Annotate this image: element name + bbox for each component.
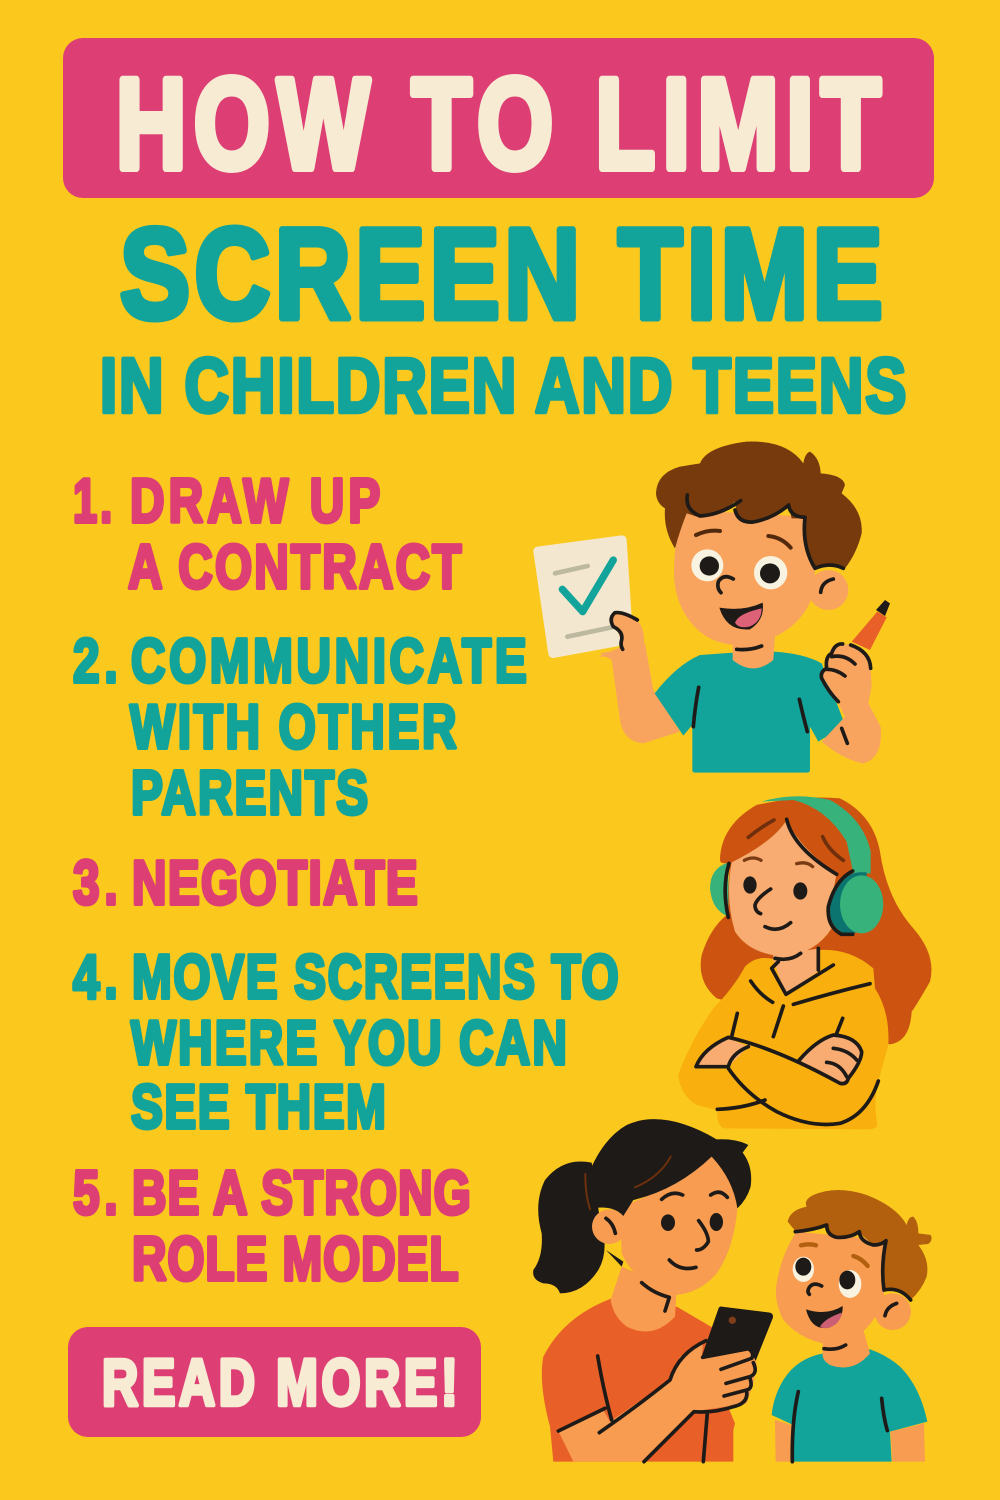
tip 4: 4.	[73, 942, 118, 1011]
tip 5	[73, 1158, 471, 1293]
eyebrows	[744, 858, 813, 867]
mother face	[620, 1157, 737, 1295]
mother ear	[592, 1209, 627, 1244]
mother facial features	[606, 1192, 727, 1311]
tip 1	[73, 466, 462, 601]
tip 4: SEE THEM	[131, 1072, 386, 1141]
mother arm and hand	[558, 1342, 757, 1462]
long hair	[701, 797, 931, 1044]
hoodie lines and arms	[696, 1038, 748, 1067]
tip 2: 2.	[73, 626, 118, 695]
son facial features	[793, 1244, 897, 1328]
eyes	[691, 549, 723, 581]
tip 4	[73, 942, 619, 1141]
son shirt	[772, 1349, 927, 1462]
left ear cup	[710, 862, 728, 917]
eyes	[743, 876, 757, 894]
nose	[718, 577, 733, 593]
read more button: READ MORE!	[102, 1346, 458, 1420]
neck	[772, 948, 820, 995]
smile	[765, 923, 791, 929]
checklist paper	[533, 535, 633, 658]
face	[674, 510, 815, 645]
eyebrows	[696, 531, 791, 548]
son neck	[823, 1330, 870, 1367]
phone	[702, 1307, 773, 1367]
tip 2: WITH OTHER	[130, 692, 456, 761]
subheading: in children and teens: IN CHILDREN AND TEENS	[100, 342, 906, 429]
left arm	[600, 643, 680, 743]
ear	[808, 570, 848, 610]
tip 5: ROLE MODEL	[132, 1224, 458, 1293]
pen	[821, 600, 890, 705]
illustration: mother and son with phone	[533, 1119, 932, 1462]
mother hair	[585, 1119, 751, 1216]
tip 3: NEGOTIATE	[132, 848, 418, 917]
son hair	[788, 1190, 932, 1300]
ponytail	[533, 1161, 605, 1293]
mother neck and collar	[611, 1267, 677, 1332]
tip 3: 3.	[73, 848, 118, 917]
son ear	[874, 1293, 911, 1330]
tip 2: COMMUNICATE	[131, 626, 527, 695]
tip 2	[73, 626, 527, 827]
hoodie	[678, 950, 888, 1129]
heading: screen time: SCREEN TIME	[120, 202, 883, 345]
tip 1: A CONTRACT	[128, 532, 462, 601]
illustration: girl with headphones	[678, 796, 931, 1129]
tip 2: PARENTS	[131, 758, 368, 827]
list of tips	[73, 466, 619, 1293]
tip 4: MOVE SCREENS TO	[132, 942, 619, 1011]
tip 1: 1.	[73, 468, 112, 536]
tip 4: WHERE YOU CAN	[131, 1008, 567, 1077]
headphones band	[762, 796, 871, 873]
hand holding paper	[598, 612, 644, 657]
fringe	[720, 802, 807, 863]
shirt	[655, 652, 845, 773]
illustration: boy with checklist and pen	[533, 442, 890, 773]
tip 5: 5.	[73, 1158, 118, 1227]
mother shirt	[542, 1298, 735, 1462]
read more button	[68, 1327, 481, 1437]
nose	[755, 889, 771, 914]
son face	[776, 1232, 885, 1345]
mouth	[719, 603, 763, 630]
heading: how to limit: HOW TO LIMIT	[116, 53, 881, 196]
neck	[733, 637, 775, 668]
right arm and hand	[822, 643, 881, 763]
title banner	[63, 38, 934, 198]
right ear cup	[830, 872, 867, 934]
hair	[656, 442, 862, 568]
tip 5: BE A STRONG	[132, 1158, 471, 1227]
tip 1: DRAW UP	[130, 466, 380, 535]
face	[729, 820, 837, 957]
